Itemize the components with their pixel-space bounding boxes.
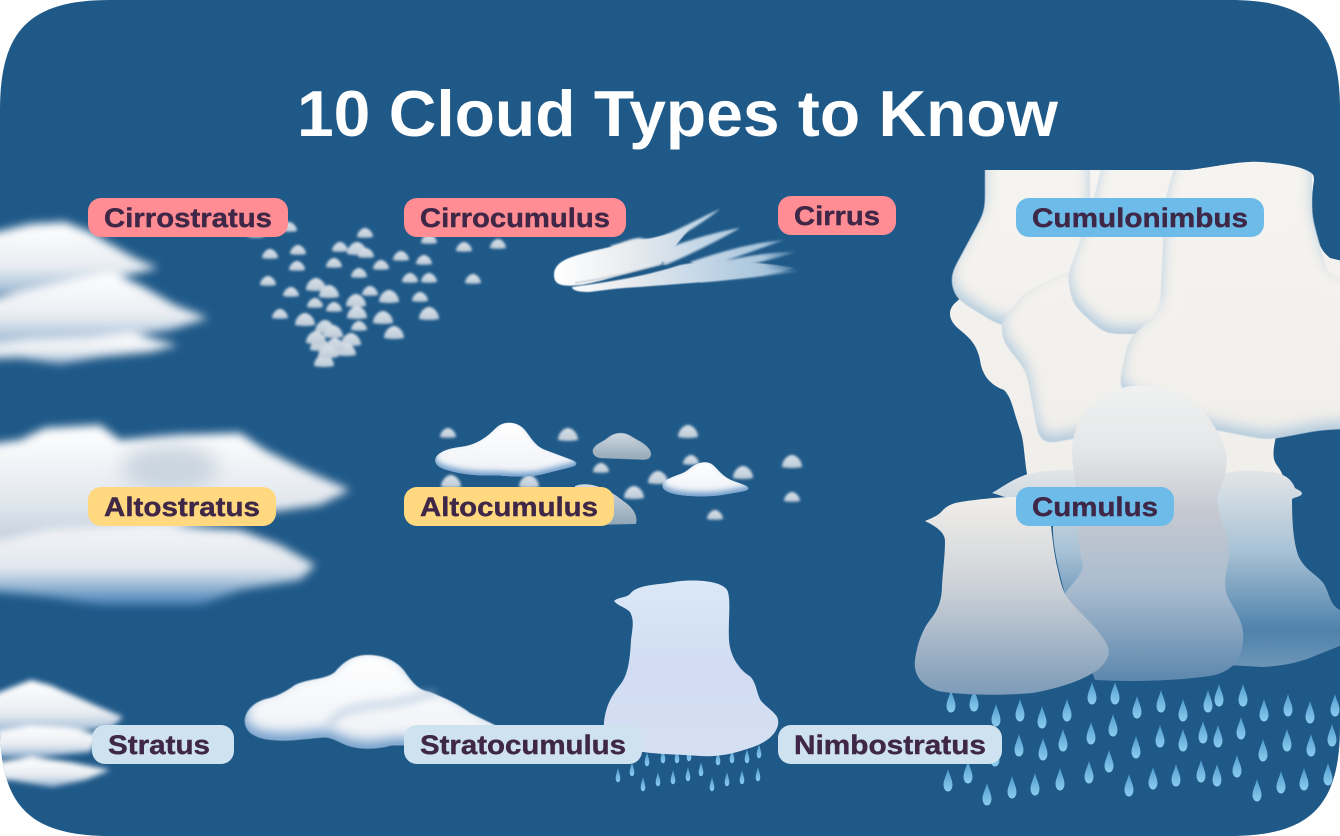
- small blurred puffs: [440, 425, 802, 520]
- label: Nimbostratus: [778, 725, 1002, 764]
- label: Cirrostratus: Cirrostratus: [104, 203, 272, 233]
- feathered streaks: [610, 209, 800, 282]
- main silhouette: [244, 654, 496, 750]
- soft grey shading: [122, 444, 218, 492]
- front left puff: [915, 497, 1109, 695]
- label: Cumulonimbus: [1016, 198, 1264, 237]
- shading between lobes: [328, 693, 435, 728]
- label: Cumulus: [1016, 487, 1174, 526]
- cloud: stratocumulus: [244, 654, 496, 750]
- cloud: stratus: [0, 680, 123, 787]
- upper left lobe: [952, 170, 1090, 325]
- right lobe: [1120, 162, 1340, 440]
- cloud: cumulus: [915, 386, 1340, 695]
- label: Stratus: Stratus: [108, 730, 210, 760]
- rain: cumulus and cumulonimbus: [944, 682, 1340, 806]
- centre lobe: [1068, 168, 1202, 334]
- tube bodies: [554, 228, 795, 292]
- label: Cumulus: Cumulus: [1032, 492, 1158, 522]
- label: Cirrus: Cirrus: [794, 201, 880, 231]
- label: Stratocumulus: Stratocumulus: [420, 730, 626, 760]
- rain: nimbostratus: [616, 744, 761, 791]
- label: Altocumulus: Altocumulus: [420, 492, 598, 522]
- label: Cirrus: [778, 196, 896, 235]
- label: Altostratus: Altostratus: [104, 492, 260, 522]
- label: Stratus: [92, 725, 234, 764]
- cloud: cumulonimbus: [950, 162, 1340, 475]
- upper and lower masses: [0, 425, 350, 605]
- cloud: cirrocumulus: [248, 222, 506, 367]
- title: 10 Cloud Types to Know: [297, 77, 1058, 150]
- cloud: altocumulus: [435, 423, 802, 525]
- label: Altocumulus: [404, 487, 614, 526]
- label: Cirrocumulus: Cirrocumulus: [420, 203, 610, 233]
- middle lobe: [1002, 273, 1088, 442]
- label: Cirrocumulus: [404, 198, 626, 237]
- cloud: cirrostratus: [0, 222, 208, 364]
- cloud: cirrus: [554, 209, 800, 292]
- label: Nimbostratus: Nimbostratus: [794, 730, 986, 760]
- label: Cumulonimbus: Cumulonimbus: [1032, 203, 1248, 233]
- puff behind label: [575, 484, 636, 525]
- back left puff: [992, 470, 1083, 594]
- back right puff: [1210, 471, 1340, 667]
- cloud: nimbostratus: [604, 580, 778, 756]
- main puff: [435, 423, 582, 476]
- anvil and stem body: [950, 150, 1340, 490]
- label: Stratocumulus: [404, 725, 642, 764]
- label: Cirrostratus: [88, 198, 288, 237]
- label: Altostratus: [88, 487, 276, 526]
- centre puff: [1065, 386, 1243, 681]
- cloud: altostratus: [0, 425, 350, 605]
- right puff: [662, 462, 755, 496]
- grey puff: [591, 433, 652, 460]
